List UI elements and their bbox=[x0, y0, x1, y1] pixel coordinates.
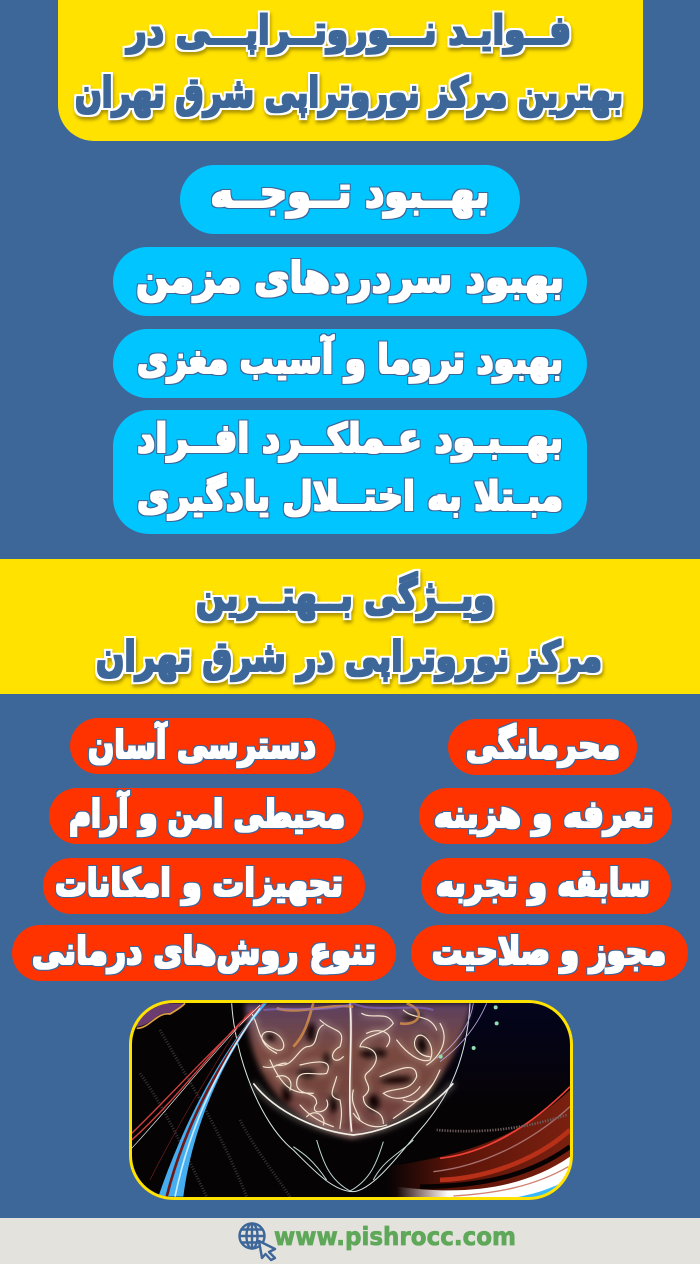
feature pill: easy access bbox=[70, 718, 335, 774]
feature pill: equipment bbox=[43, 858, 365, 914]
icon: globe with cursor bbox=[240, 1224, 275, 1260]
feature pill: safe environment: محیطی امن و آرام bbox=[69, 790, 345, 837]
title panel: فــوایـد نـــوروتــراپـــی در bbox=[125, 8, 571, 54]
feature pill: cost bbox=[419, 788, 672, 844]
feature pill: experience bbox=[421, 858, 671, 914]
website address: www.pishrocc.com bbox=[274, 1222, 516, 1251]
feature pill: safe environment bbox=[49, 788, 363, 844]
feature pill: equipment: تجهیزات و امکانات bbox=[55, 861, 343, 906]
benefit pill: attention bbox=[180, 165, 520, 234]
section heading band: ویــژگی بــهتــرین bbox=[196, 571, 494, 621]
benefit pill: learning disorders bbox=[113, 410, 587, 534]
benefit pill: learning disorders: بهــبـود عـملکــرد افــراد bbox=[137, 416, 563, 462]
brain illustration bbox=[130, 1000, 572, 1200]
section heading band bbox=[0, 559, 700, 694]
feature pill: cost: تعرفه و هزینه bbox=[434, 792, 654, 837]
feature pill: treatment variety: تنوع روش‌های درمانی bbox=[32, 929, 376, 974]
feature pill: confidentiality bbox=[448, 719, 637, 775]
benefit pill: learning disorders: مبـتلا به اختــلال یادگیری bbox=[137, 473, 563, 520]
footer bar bbox=[0, 1218, 700, 1264]
benefit pill: brain trauma: بهبود تروما و آسیب مغزی bbox=[137, 334, 563, 383]
title panel bbox=[58, 0, 643, 141]
benefit pill: attention: بهــبود تــوجــه bbox=[210, 167, 490, 218]
feature pill: treatment variety bbox=[12, 925, 396, 981]
benefit pill: chronic headaches: بهبود سردردهای مزمن bbox=[136, 253, 564, 303]
benefit pill: chronic headaches bbox=[113, 247, 587, 316]
benefit pill: brain trauma bbox=[113, 329, 587, 398]
feature pill: easy access: دسترسی آسان bbox=[88, 721, 316, 767]
feature pill: confidentiality: محرمانگی bbox=[466, 723, 620, 767]
feature pill: experience: سابقه و تجربه bbox=[436, 861, 650, 906]
